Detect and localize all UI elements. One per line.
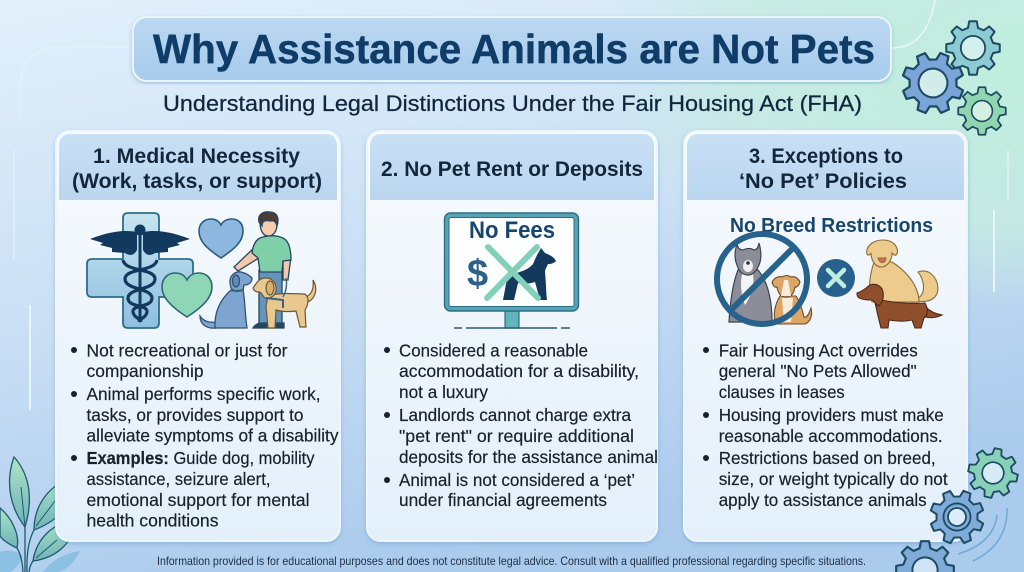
icon: grey dog [729,243,772,322]
bullet list [71,341,339,531]
icon: prohibition circle [717,234,807,324]
icon: sitting blue dog [200,272,252,328]
bullet list: accommodation for a disability, [399,361,639,381]
label: no breed restrictions: No Breed Restrictions [730,214,933,237]
bullet list: not a luxury [399,382,488,402]
icon: small tan dog [772,276,812,324]
icon: green heart [162,273,212,317]
icon: dachshund [857,284,942,328]
heading: 1. Medical Necessity [93,144,300,168]
bullet list: Housing providers must make [719,405,944,425]
bullet list: apply to assistance animals [719,490,927,510]
dog silhouette [503,248,556,300]
heading [72,144,322,193]
bullet list: deposits for the assistance animal [399,447,658,467]
icon: tan guide dog [253,278,316,328]
bullet list: Animal is not considered a ‘pet’ [399,470,635,490]
bullet list: health conditions [86,511,219,531]
bullet list: Restrictions based on breed, [719,448,936,468]
icon: medical cross with caduceus [87,213,193,328]
bullet list [703,341,948,510]
bullet list: under financial agreements [399,490,607,510]
icon: no fees sign [444,213,578,328]
bullet list: alleviate symptoms of a disability [86,426,339,446]
icon: blue heart [199,219,243,258]
heading [739,144,907,193]
panel: exceptions [684,131,967,541]
icon: gears top right [893,21,1006,135]
crossed lines [487,247,538,298]
icon: golden retriever [867,240,938,302]
sign text: No Fees [469,217,555,244]
footer disclaimer: Information provided is for educational purposes and does not constitute legal advice. Consult with a qualified professional regarding specific situations. [157,554,866,568]
title: Why Assistance Animals are Not Pets [153,26,875,72]
bullet list: Animal performs specific work, [86,384,320,404]
icon: gears bottom right [896,444,1022,572]
bullet list [384,341,658,510]
panel: no pet rent [367,131,658,541]
bullet list: general "No Pets Allowed" [719,361,917,381]
bullet list: tasks, or provides support to [86,405,304,425]
heading: (Work, tasks, or support) [72,169,322,193]
bullet list: "pet rent" or require additional [399,426,634,446]
icon: person [234,212,291,328]
bullet list: emotional support for mental [86,490,310,510]
heading: 2. No Pet Rent or Deposits [381,157,643,181]
heading: 3. Exceptions to [749,144,903,168]
bullet list: Considered a reasonable [399,341,588,361]
bullet list: Fair Housing Act overrides [719,341,918,361]
bullet list: companionship [86,361,204,381]
bullet list: Not recreational or just for [86,341,288,361]
bullet list: assistance, seizure alert, [86,469,270,489]
subtitle: Understanding Legal Distinctions Under the Fair Housing Act (FHA) [163,91,862,116]
bullet list: reasonable accommodations. [719,426,943,446]
title banner [133,17,891,81]
bullet list: clauses in leases [719,382,845,402]
dollar sign: $ [467,253,488,295]
icon: x badge [817,259,855,297]
panel: medical necessity [56,131,340,541]
bullet list: Landlords cannot charge extra [399,405,631,425]
icon: plant bottom left [0,457,80,572]
bullet list: size, or weight typically do not [719,469,948,489]
bullet list: Examples: Guide dog, mobility [86,448,315,468]
heading: ‘No Pet’ Policies [739,169,907,193]
